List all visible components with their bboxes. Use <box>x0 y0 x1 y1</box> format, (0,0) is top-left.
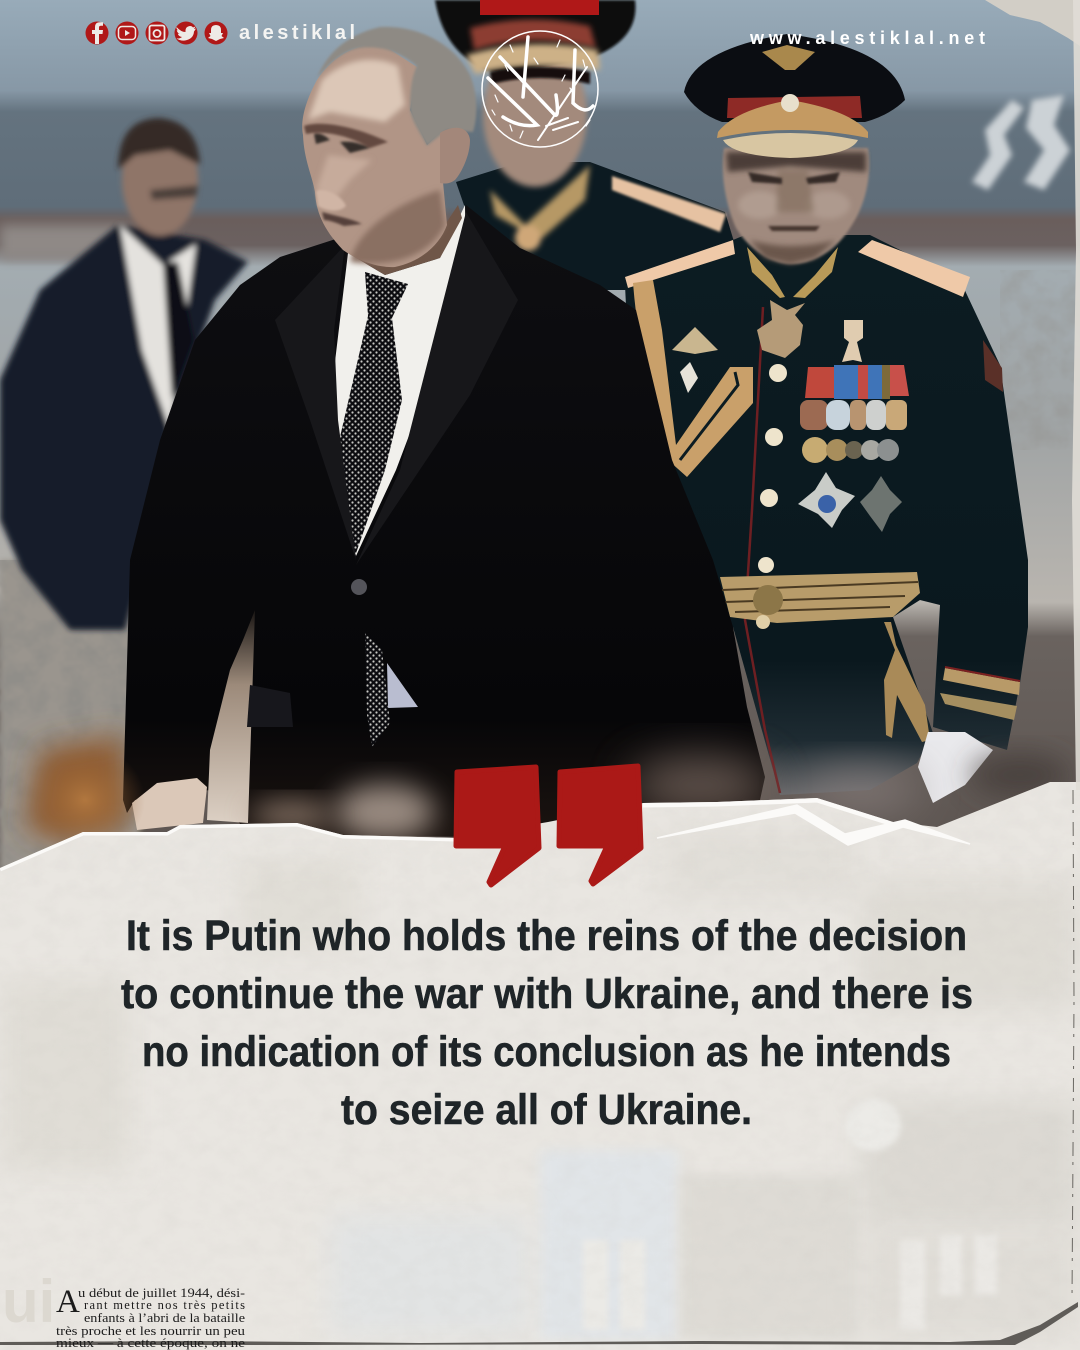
jacket pocket flap <box>247 685 293 727</box>
quote text: It is Putin who holds the reins of the decision <box>126 912 967 960</box>
red piping <box>745 307 780 793</box>
collar <box>747 247 838 298</box>
lapels <box>275 245 356 560</box>
French newspaper clipping: rant mettre nos très petits <box>84 1298 245 1312</box>
face <box>723 148 869 264</box>
icon: twitter <box>174 22 198 44</box>
breast badges <box>672 327 718 354</box>
peaked cap <box>684 34 905 122</box>
dress dagger <box>884 622 930 742</box>
French newspaper clipping: A <box>56 1284 80 1320</box>
star orders <box>798 472 855 528</box>
figure: general with medals on the right <box>586 34 1028 803</box>
white shirt <box>334 205 466 556</box>
figure: blurred bodyguard on the left <box>0 118 248 630</box>
neck <box>343 205 462 275</box>
quote text: to continue the war with Ukraine, and there is <box>121 970 973 1018</box>
gold sleeve braid <box>580 610 622 645</box>
French newspaper clipping: enfants à l’abri de la bataille <box>84 1311 246 1325</box>
head <box>302 43 447 267</box>
French newspaper clipping <box>56 1284 246 1350</box>
icon: facebook <box>86 22 108 44</box>
tunic buttons <box>758 364 787 573</box>
Alestiklal calligraphy logo <box>482 31 598 147</box>
gold belt <box>720 572 920 629</box>
shoulder patch <box>983 340 1003 392</box>
French newspaper clipping: u début de juillet 1944, dési- <box>78 1286 245 1300</box>
warm light and fog at the foot of the photo <box>25 745 1070 855</box>
hair <box>317 27 476 146</box>
dotted tie <box>337 272 408 556</box>
ear <box>440 128 470 184</box>
lower shirt and tie <box>387 663 418 708</box>
icon: instagram <box>146 22 168 44</box>
gold aiguillette <box>633 280 753 477</box>
quote text: no indication of its conclusion as he intends <box>142 1028 951 1076</box>
general's dark lower sleeve <box>580 450 660 795</box>
faint collage letters: ui <box>2 1268 55 1335</box>
hero star <box>842 320 863 362</box>
epaulettes <box>625 240 735 288</box>
quote text: to seize all of Ukraine. <box>341 1086 752 1134</box>
icon: red quotation marks <box>456 766 641 885</box>
figure: general in the background <box>435 0 735 795</box>
gap between arm and body <box>207 610 255 823</box>
order cross with swords <box>757 300 805 358</box>
blurred legs with warm light <box>25 735 125 840</box>
brand name: alestiklal <box>239 22 355 44</box>
suit button <box>351 579 367 595</box>
icon: youtube <box>116 22 138 44</box>
medal ribbons <box>800 365 909 463</box>
website address: www.alestiklal.net <box>749 28 985 48</box>
social icons row <box>86 22 228 44</box>
French newspaper clipping: mieux — à cette époque, on ne <box>56 1336 246 1350</box>
white tear highlight <box>0 800 893 869</box>
white tear line across the photo <box>657 805 970 845</box>
ship hull lettering <box>972 95 1070 190</box>
French newspaper clipping: très proche et les nourrir un peu <box>56 1324 246 1338</box>
paper panel with torn edge <box>0 770 1080 1350</box>
sleeve cuff <box>940 667 1020 720</box>
hand <box>132 778 207 830</box>
figure: Putin <box>123 27 765 838</box>
icon: snapchat <box>204 22 228 44</box>
dark suit <box>123 205 765 838</box>
quote text <box>121 912 973 1134</box>
newspaper collage texture <box>0 830 1080 1340</box>
white glove <box>918 732 993 803</box>
red tab at top <box>480 0 599 15</box>
left white glove <box>586 663 620 760</box>
